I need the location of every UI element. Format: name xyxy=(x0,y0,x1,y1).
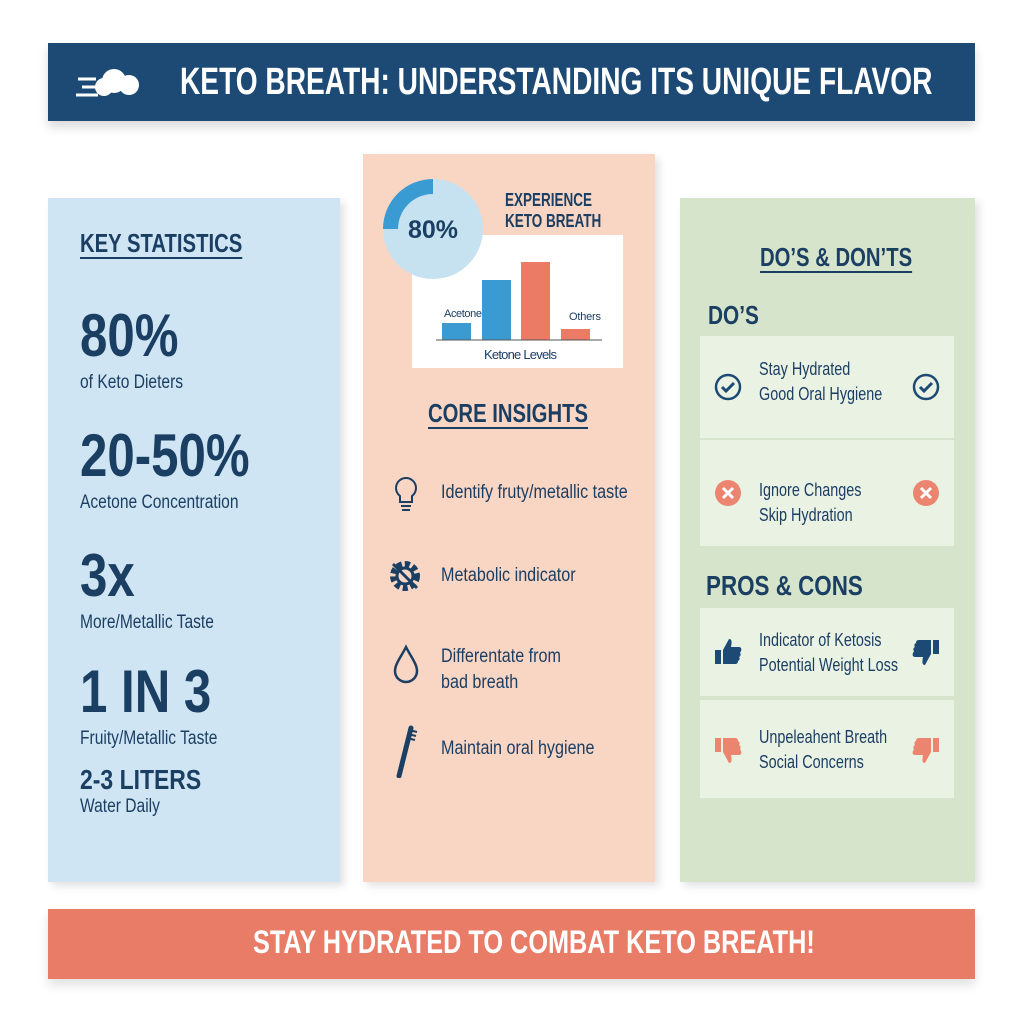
row: cons xyxy=(700,700,954,798)
chart box xyxy=(412,235,623,368)
heading: KEY STATISTICS xyxy=(80,228,242,258)
insight: gear: Metabolic indicator xyxy=(441,565,576,586)
insight: drop xyxy=(394,644,561,693)
panel: key statistics xyxy=(48,198,340,882)
subheading pros & cons: PROS & CONS xyxy=(706,570,863,601)
subheading dos: DO’S xyxy=(708,300,759,330)
icon: thumb up xyxy=(715,639,742,664)
stat 80%: 80% xyxy=(80,302,178,369)
panel: dos & donts xyxy=(680,198,975,882)
stat 80%: of Keto Dieters xyxy=(80,372,183,393)
label: EXPERIENCE xyxy=(505,190,592,210)
bar chart xyxy=(436,262,602,362)
stat liters: Water Daily xyxy=(80,796,160,817)
label: KETO BREATH xyxy=(505,211,601,231)
insight: drop: bad breath xyxy=(441,672,518,693)
donut 80%: 80% xyxy=(408,216,458,244)
stat 20-50%: 20-50% xyxy=(80,422,250,489)
bar chart: Ketone Levels xyxy=(484,347,558,362)
row: donts: Ignore Changes xyxy=(759,480,861,500)
stat 3x xyxy=(80,542,214,633)
stat liters xyxy=(80,764,201,817)
icon: thumb down right xyxy=(912,738,939,763)
row: cons: Social Concerns xyxy=(759,752,864,772)
stat 1 in 3: Fruity/Metallic Taste xyxy=(80,728,217,749)
insight: toothbrush xyxy=(396,726,595,778)
insight: gear xyxy=(390,561,576,591)
stat 3x: 3x xyxy=(80,542,135,609)
header xyxy=(48,43,975,121)
row: donts xyxy=(700,440,954,546)
icon: breath cloud xyxy=(76,69,139,96)
label xyxy=(505,190,601,231)
row: cons: Unpeleahent Breath xyxy=(759,727,887,747)
row: dos xyxy=(700,336,954,438)
stat 20-50%: Acetone Concentration xyxy=(80,492,239,513)
insight: bulb xyxy=(395,477,628,511)
icon: thumb down left xyxy=(715,738,742,763)
title: KETO BREATH: UNDERSTANDING ITS UNIQUE FLAVOR xyxy=(180,61,932,103)
banner xyxy=(48,909,975,979)
donut 80% xyxy=(383,179,483,279)
banner text: STAY HYDRATED TO COMBAT KETO BREATH! xyxy=(253,924,815,960)
insight: bulb: Identify fruty/metallic taste xyxy=(441,482,628,503)
row: donts: Skip Hydration xyxy=(759,505,853,525)
stat liters: 2-3 LITERS xyxy=(80,764,201,795)
heading: DO’S & DON’TS xyxy=(760,242,912,272)
row: pros: Potential Weight Loss xyxy=(759,655,898,675)
row: pros: Indicator of Ketosis xyxy=(759,630,881,650)
stat 3x: More/Metallic Taste xyxy=(80,612,214,633)
bar chart: Acetone xyxy=(444,308,482,320)
icon: thumb down xyxy=(912,640,939,665)
insight: toothbrush: Maintain oral hygiene xyxy=(441,738,595,759)
bar chart: Others xyxy=(569,311,602,323)
row: dos: Good Oral Hygiene xyxy=(759,384,882,404)
panel: core insights xyxy=(363,154,655,882)
row: dos: Stay Hydrated xyxy=(759,359,850,379)
insight: drop: Differentate from xyxy=(441,646,561,667)
stat 1 in 3: 1 IN 3 xyxy=(80,658,211,725)
row: pros xyxy=(700,608,954,696)
heading: CORE INSIGHTS xyxy=(428,398,588,428)
